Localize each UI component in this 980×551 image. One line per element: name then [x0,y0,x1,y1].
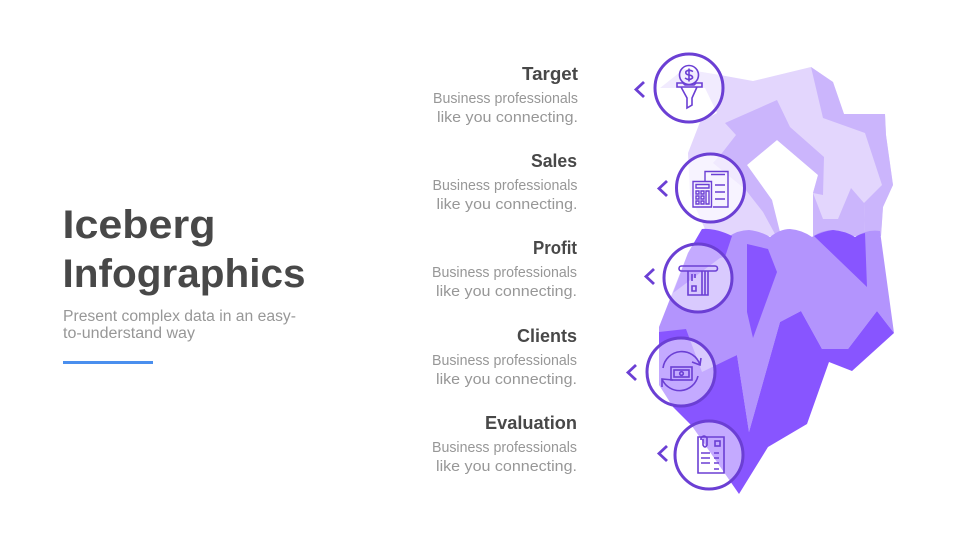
iceberg below water: top-right dark facet [814,230,867,287]
label: Evaluation: Evaluation [485,413,577,433]
label: Sales: Business professionals [432,177,578,194]
title: Infographics [62,252,306,296]
label: Clients [432,326,577,388]
label: Profit: like you connecting. [436,283,577,300]
chevron 3 [646,269,654,284]
label: Profit: Profit [533,238,577,258]
step circle 2 [676,154,744,222]
label: Target: Business professionals [433,90,578,107]
step circle 4 [647,338,715,406]
icon: calculator and document [693,172,728,207]
label: Evaluation: Business professionals [432,439,577,456]
label: Target: like you connecting. [437,109,578,126]
title [62,203,306,296]
iceberg above water: lower right shade [813,188,865,236]
iceberg illustration [659,67,894,494]
label: Evaluation: like you connecting. [436,458,577,475]
icon: card in ATM slot [679,266,718,295]
iceberg above water: light body [660,67,893,236]
chevron 5 [659,446,667,461]
iceberg below water: dark base [659,311,894,494]
label: Target [433,64,578,126]
label: Sales: like you connecting. [436,196,578,213]
iceberg below water: top-left dark facet [673,229,732,293]
chevron 1 [636,82,644,97]
icon: funnel with coin [677,66,702,108]
label: Sales [432,151,578,213]
title: Iceberg [62,203,216,247]
label: Target: Target [522,64,578,84]
iceberg below water: centre shard [747,244,777,338]
label: Evaluation [432,413,577,475]
step circle 1 [655,54,723,122]
icon: report with paperclip [698,436,724,473]
chevron 4 [628,365,636,380]
icon: money with circular arrows [662,352,701,391]
iceberg below water: mid body [659,229,894,432]
chevron 2 [659,181,667,196]
label: Profit: Business professionals [432,264,577,281]
label: Clients: Business professionals [432,352,577,369]
step circle 3 [664,244,732,312]
accent line [63,361,153,364]
subtitle: to-understand way [63,325,195,342]
step circle 5 [675,421,743,489]
label: Clients: Clients [517,326,577,346]
label: Profit [432,238,577,300]
label: Sales: Sales [531,151,577,171]
subtitle [63,308,296,342]
subtitle: Present complex data in an easy- [63,308,296,325]
iceberg above water: arch shade [713,100,824,234]
label: Clients: like you connecting. [436,371,577,388]
iceberg above water: right shade [811,67,893,236]
